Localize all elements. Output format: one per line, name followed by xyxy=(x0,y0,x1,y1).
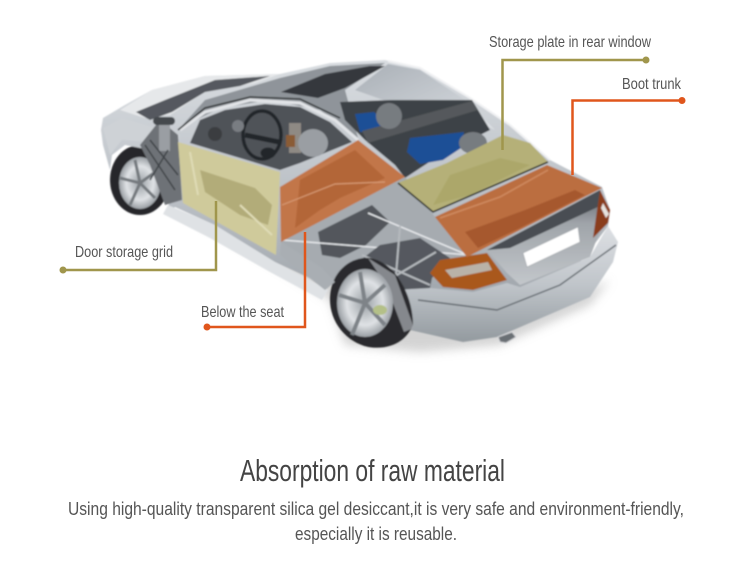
callout: boot trunk xyxy=(572,76,686,175)
tail lamp right xyxy=(593,190,610,238)
trunk lid lower xyxy=(487,190,604,285)
car body silhouette xyxy=(101,60,610,320)
rear seat headrests xyxy=(376,103,487,154)
callout: storage plate in rear window: Storage plate in rear window xyxy=(489,34,651,51)
rear cabin opening xyxy=(340,100,490,178)
sill band xyxy=(163,205,328,300)
windscreen and roof xyxy=(180,63,385,138)
callout: storage plate in rear window xyxy=(489,34,651,150)
highlight: door yellow xyxy=(178,142,280,255)
license plate xyxy=(523,227,580,267)
rear side panel xyxy=(281,177,467,282)
callout: below the seat: Below the seat xyxy=(201,304,284,321)
title: Absorption of raw material xyxy=(240,453,505,488)
car illustration xyxy=(101,60,618,352)
rear cabin beam xyxy=(362,101,478,143)
rear glass roof xyxy=(355,64,495,130)
rear suspension detail xyxy=(358,238,450,300)
engine bay xyxy=(136,76,270,120)
front fender highlight xyxy=(103,118,180,160)
rear wheel xyxy=(330,258,414,348)
front suspension detail xyxy=(140,120,182,205)
description xyxy=(68,498,684,544)
front seat xyxy=(298,129,328,157)
highlight: trunk orange xyxy=(435,165,602,257)
front wheel xyxy=(110,145,170,215)
bumper xyxy=(393,226,618,342)
lower door and body panel xyxy=(280,242,335,290)
steering wheel xyxy=(243,111,281,159)
dark sunroof panel xyxy=(281,66,385,98)
description: especially it is reusable. xyxy=(295,523,457,544)
callout: door storage grid xyxy=(60,201,216,274)
callout: boot trunk: Boot trunk xyxy=(622,76,682,93)
tail lamp left xyxy=(430,253,507,290)
ground shadow xyxy=(180,210,610,352)
callout: below the seat xyxy=(201,232,305,330)
hood panel xyxy=(120,74,280,118)
highlight: seat orange xyxy=(280,140,405,242)
front cabin interior xyxy=(190,104,352,170)
exhaust tip xyxy=(498,332,516,343)
highlight: rear window yellow xyxy=(398,135,548,212)
dashboard detail xyxy=(289,123,301,153)
callout: door storage grid: Door storage grid xyxy=(75,244,173,261)
blue rear upholstery xyxy=(355,112,392,133)
